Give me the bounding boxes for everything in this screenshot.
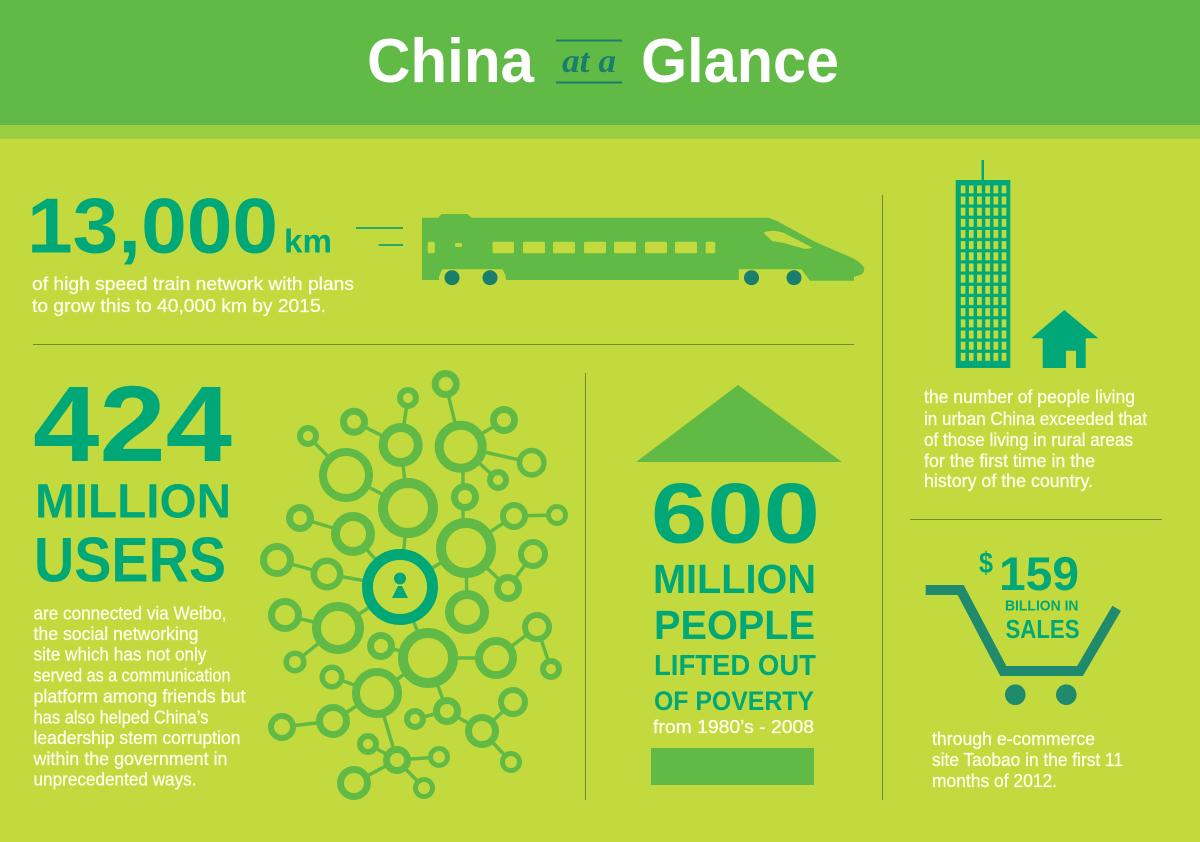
urban text — [924, 387, 1147, 491]
poverty statistic: PEOPLE — [654, 602, 815, 648]
urban text: the number of people living — [924, 387, 1135, 407]
poverty statistic — [651, 467, 820, 737]
icon: shopping cart — [926, 590, 1117, 705]
urban text: of those living in rural areas — [924, 430, 1133, 450]
urban text: history of the country. — [924, 471, 1093, 491]
icon: skyscraper — [956, 160, 1010, 368]
urban text: for the first time in the — [924, 451, 1095, 471]
poverty statistic: LIFTED OUT — [654, 650, 816, 682]
sales statistic: SALES — [1006, 614, 1080, 644]
urban text: in urban China exceeded that — [924, 409, 1147, 429]
weibo statistic heading: USERS — [34, 526, 226, 596]
weibo description: has also helped China’s — [34, 707, 208, 727]
weibo statistic heading: MILLION — [35, 476, 231, 529]
header banner — [0, 0, 1200, 139]
weibo statistic heading — [33, 363, 232, 596]
network diagram — [264, 374, 566, 796]
train description: of high speed train network with plans — [32, 274, 354, 294]
weibo description: the social networking — [34, 624, 198, 644]
weibo statistic heading: 424 — [33, 363, 232, 484]
title: Glance — [641, 27, 839, 96]
icon: central user node — [368, 554, 432, 620]
e-commerce text: site Taobao in the first 11 — [932, 750, 1123, 770]
weibo description: are connected via Weibo, — [34, 603, 226, 623]
poverty statistic: from 1980’s - 2008 — [653, 717, 814, 737]
sales statistic: $ — [979, 547, 993, 580]
icon: house — [1031, 310, 1098, 368]
weibo description — [33, 603, 245, 790]
title: China — [367, 27, 534, 96]
weibo description: unprecedented ways. — [34, 770, 196, 790]
e-commerce text: through e-commerce — [932, 729, 1095, 749]
icon: up arrow — [636, 385, 842, 785]
weibo description: platform among friends but — [34, 686, 246, 706]
icon: high speed train — [422, 214, 864, 285]
poverty statistic: MILLION — [653, 556, 816, 602]
weibo description: within the government in — [33, 749, 227, 769]
train description — [32, 274, 354, 316]
title — [367, 27, 839, 96]
title: at a — [562, 43, 616, 80]
poverty statistic: OF POVERTY — [654, 686, 814, 716]
e-commerce text: months of 2012. — [932, 771, 1057, 791]
weibo description: leadership stem corruption — [34, 728, 240, 748]
weibo description: served as a communication — [34, 666, 230, 686]
train statistic heading: km — [284, 223, 332, 260]
sales statistic: BILLION IN — [1005, 598, 1078, 614]
sales statistic — [979, 547, 1080, 644]
train description: to grow this to 40,000 km by 2015. — [32, 296, 326, 316]
sales statistic: 159 — [999, 547, 1079, 600]
poverty statistic: 600 — [651, 467, 820, 562]
e-commerce text — [932, 729, 1123, 791]
weibo description: site which has not only — [34, 645, 206, 665]
dividers — [33, 195, 1162, 800]
icon: speed lines — [356, 228, 403, 245]
train statistic heading: 13,000 — [27, 182, 278, 270]
